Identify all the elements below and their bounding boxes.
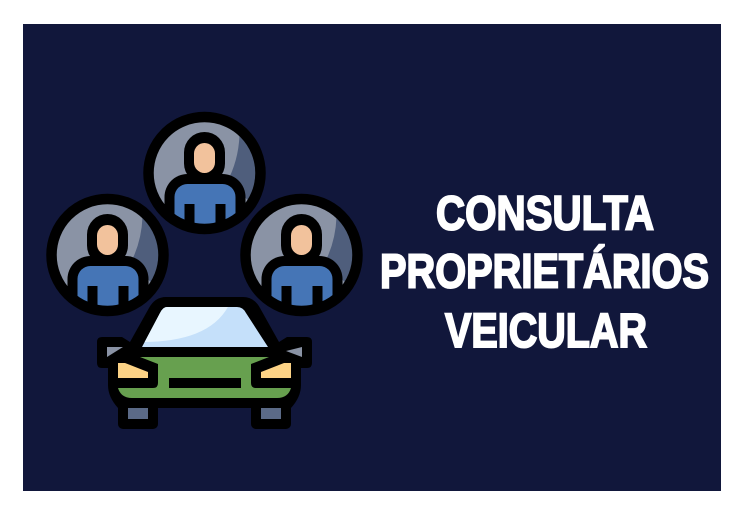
windshield (142, 307, 268, 347)
car silhouette (97, 297, 312, 408)
headlight, right (261, 363, 291, 378)
icon: car, front view (97, 297, 312, 429)
icon: person in circle, right (246, 199, 362, 316)
icon: person in circle, top (148, 117, 264, 234)
headlight, left (118, 363, 148, 378)
title: line 1: CONSULTA (436, 186, 654, 240)
mirror, right (286, 347, 302, 357)
icon: person in circle, left (52, 199, 168, 316)
car body paint (118, 357, 291, 398)
title: line 3: VEICULAR (445, 304, 647, 358)
grille (169, 378, 241, 388)
car wheels (118, 395, 291, 429)
mirror, left (107, 347, 123, 357)
